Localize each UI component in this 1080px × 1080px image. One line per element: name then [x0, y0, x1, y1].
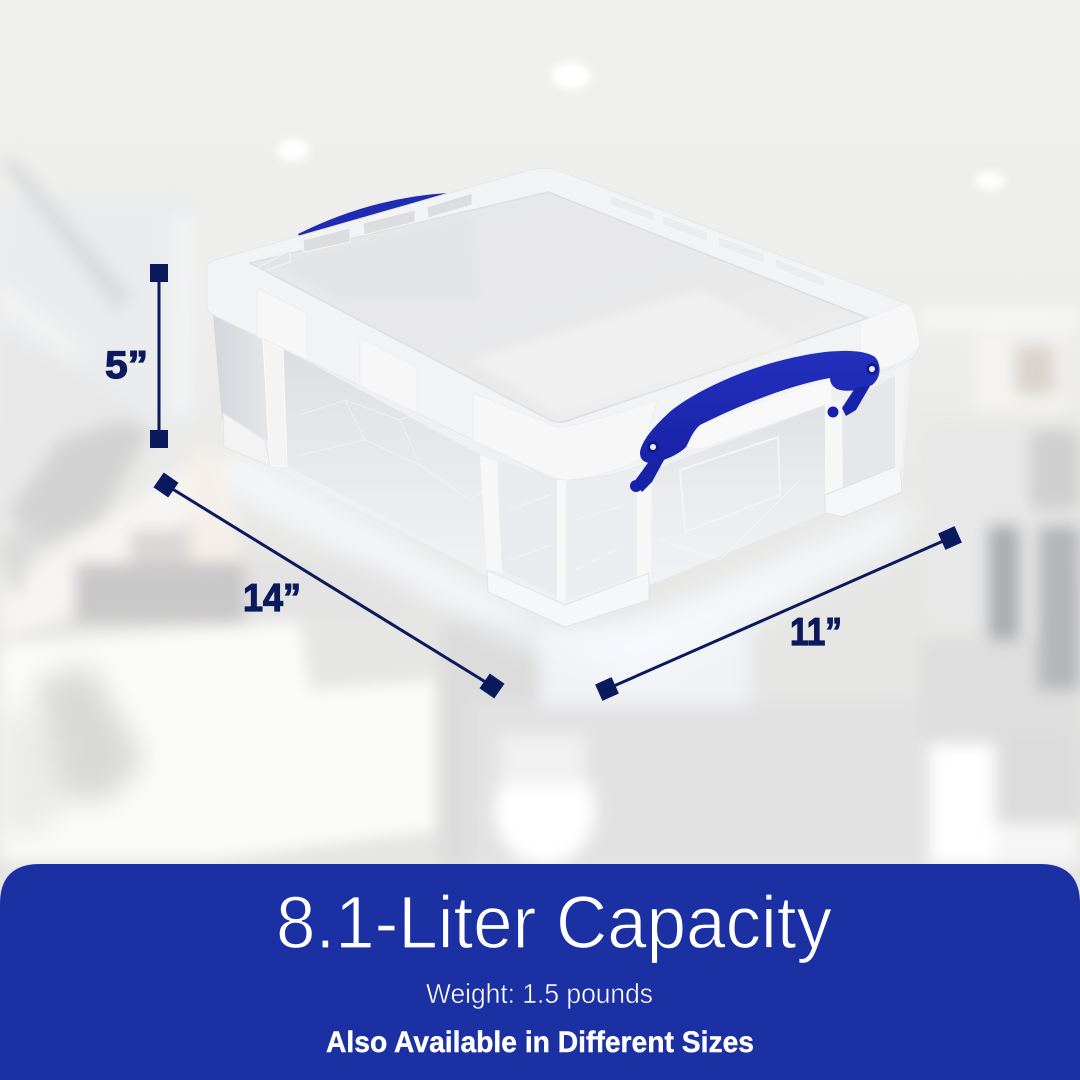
lid back windows — [258, 193, 472, 272]
box lid — [207, 168, 920, 480]
back handle — [298, 193, 447, 237]
box body — [213, 315, 911, 627]
panel: capacity footer — [0, 864, 1080, 1080]
dimension: width 11 inches: 11” — [790, 611, 842, 654]
dimension: length 14 inches: 14” — [243, 577, 301, 620]
product: clear storage box — [207, 168, 920, 627]
text: weight: Weight: 1.5 pounds — [426, 978, 653, 1009]
front handle — [630, 351, 880, 492]
text: available sizes: Also Available in Different Sizes — [326, 1026, 754, 1059]
heading: capacity: 8.1-Liter Capacity — [276, 881, 832, 964]
dimension: height 5 inches: 5” — [105, 344, 148, 387]
dimension: height 5 inches — [105, 264, 168, 448]
dimension: width 11 inches — [595, 526, 962, 701]
dimension: length 14 inches — [153, 472, 505, 699]
lid rim segments — [257, 288, 920, 480]
